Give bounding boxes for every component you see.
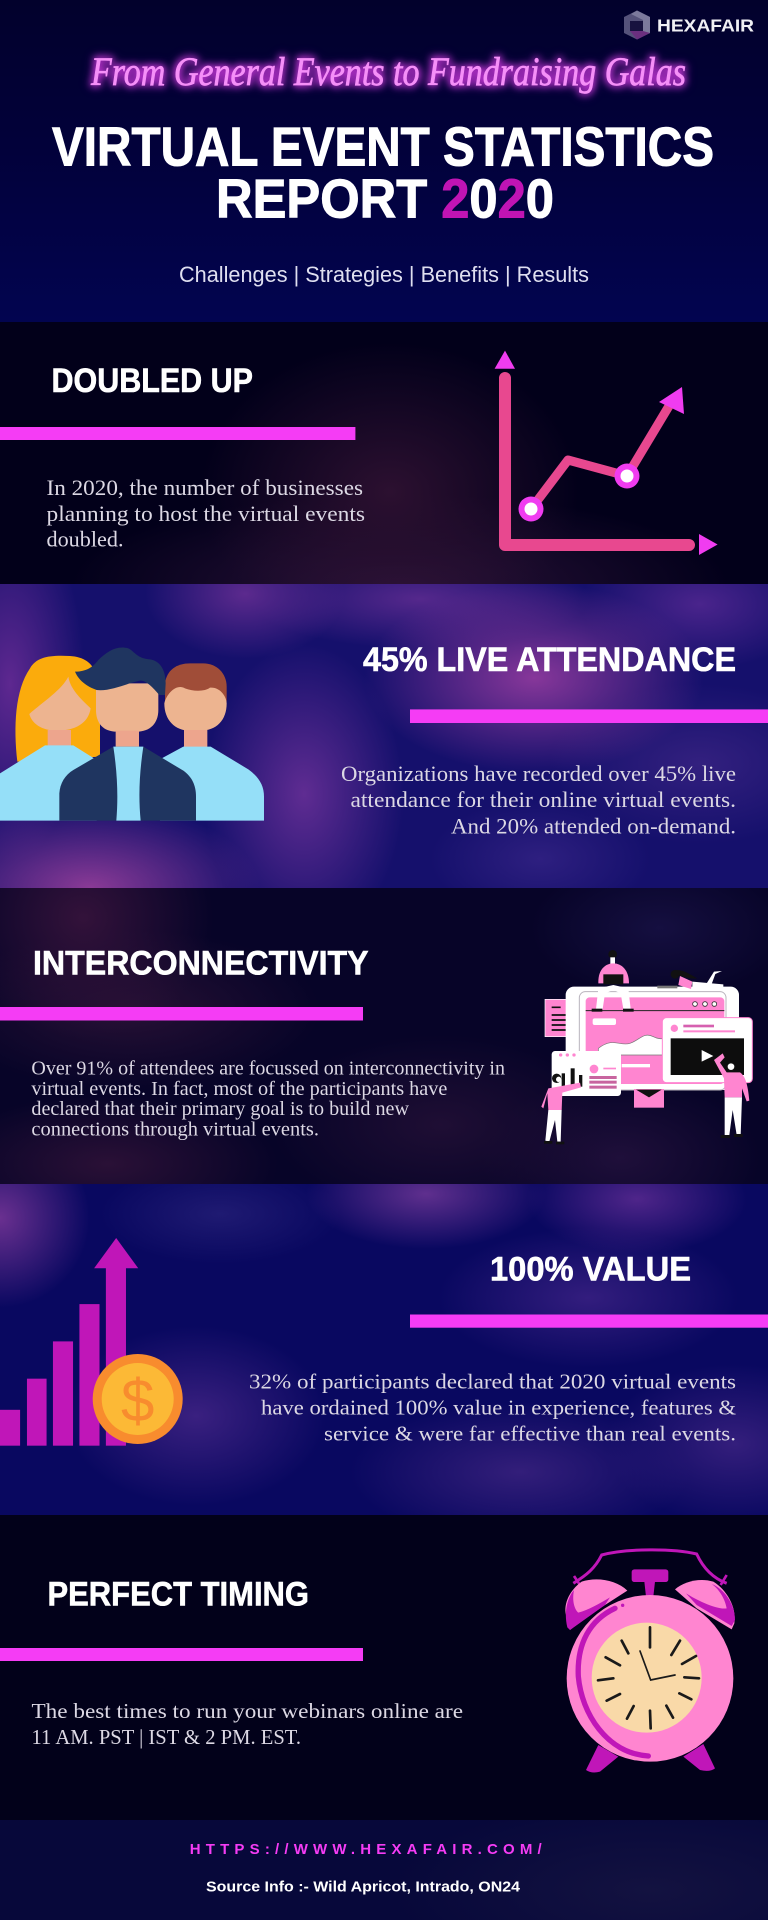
- body text: [249, 1370, 736, 1446]
- icon: three people: [0, 647, 264, 821]
- heading: 100% VALUE: [490, 1250, 691, 1288]
- panel: 100% value: [0, 1184, 768, 1515]
- body text: Over 91% of attendees are focussed on interconnectivity in: [31, 1058, 505, 1080]
- body text: attendance for their online virtual events.: [350, 787, 736, 812]
- envelope: [634, 1089, 664, 1108]
- chart card: [552, 1051, 621, 1096]
- panel: interconnectivity: [0, 888, 768, 1184]
- body text: 32% of participants declared that 2020 virtual events: [249, 1370, 736, 1394]
- dollar sign: $: [121, 1367, 154, 1434]
- body text: In 2020, the number of businesses: [46, 475, 363, 500]
- body text: [31, 1058, 505, 1140]
- heading: INTERCONNECTIVITY: [33, 945, 369, 983]
- body text: connections through virtual events.: [31, 1119, 319, 1140]
- icon: line chart: [495, 351, 718, 555]
- body text: The best times to run your webinars online are: [32, 1699, 463, 1723]
- title: REPORT 2020: [216, 168, 554, 230]
- lying person: [657, 970, 723, 989]
- body text: And 20% attended on-demand.: [451, 813, 736, 838]
- panel: header: [0, 0, 768, 322]
- heading: DOUBLED UP: [52, 362, 253, 400]
- heading: 45% LIVE ATTENDANCE: [363, 641, 736, 679]
- document: [545, 999, 574, 1037]
- website link: HTTPS://WWW.HEXAFAIR.COM/: [190, 1841, 543, 1858]
- panel: footer: [0, 1820, 768, 1920]
- icon: rising bars with coin: [0, 1238, 183, 1446]
- sitting person: [592, 950, 634, 1012]
- logo: Hexafair: HEXAFAIR: [657, 16, 754, 36]
- body text: 11 AM. PST | IST & 2 PM. EST.: [32, 1725, 301, 1749]
- body text: have ordained 100% value in experience, features &: [261, 1396, 736, 1420]
- panel: doubled up: [0, 322, 768, 584]
- accent bar: [0, 1007, 363, 1020]
- body text: virtual events. In fact, most of the participants have: [31, 1079, 447, 1100]
- pointing person right: [714, 1053, 749, 1138]
- panel: perfect timing: [0, 1515, 768, 1820]
- tagline: Challenges | Strategies | Benefits | Results: [179, 262, 589, 287]
- illustration: people around dashboard: [541, 950, 752, 1144]
- source info: Source Info :- Wild Apricot, Intrado, ON24: [206, 1880, 520, 1896]
- body text: [341, 761, 736, 838]
- body text: doubled.: [46, 527, 124, 552]
- body text: [46, 475, 365, 552]
- clock ticks and hands: [598, 1627, 699, 1728]
- body text: Organizations have recorded over 45% live: [341, 761, 736, 786]
- body text: planning to host the virtual events: [46, 501, 365, 526]
- title: [52, 116, 714, 230]
- logo: Hexafair: [624, 10, 754, 40]
- panel: 45% live attendance: [0, 584, 768, 888]
- video card: [662, 1018, 752, 1083]
- pointing person left: [541, 1074, 581, 1144]
- body text: service & were far effective than real events.: [324, 1422, 736, 1446]
- accent bar: [410, 1314, 768, 1328]
- accent bar: [410, 709, 768, 723]
- icon: alarm clock: [565, 1550, 735, 1773]
- heading: PERFECT TIMING: [48, 1576, 309, 1614]
- accent bar: [0, 1648, 363, 1661]
- body text: [32, 1699, 463, 1749]
- body text: declared that their primary goal is to build new: [31, 1099, 409, 1120]
- accent bar: [0, 427, 355, 440]
